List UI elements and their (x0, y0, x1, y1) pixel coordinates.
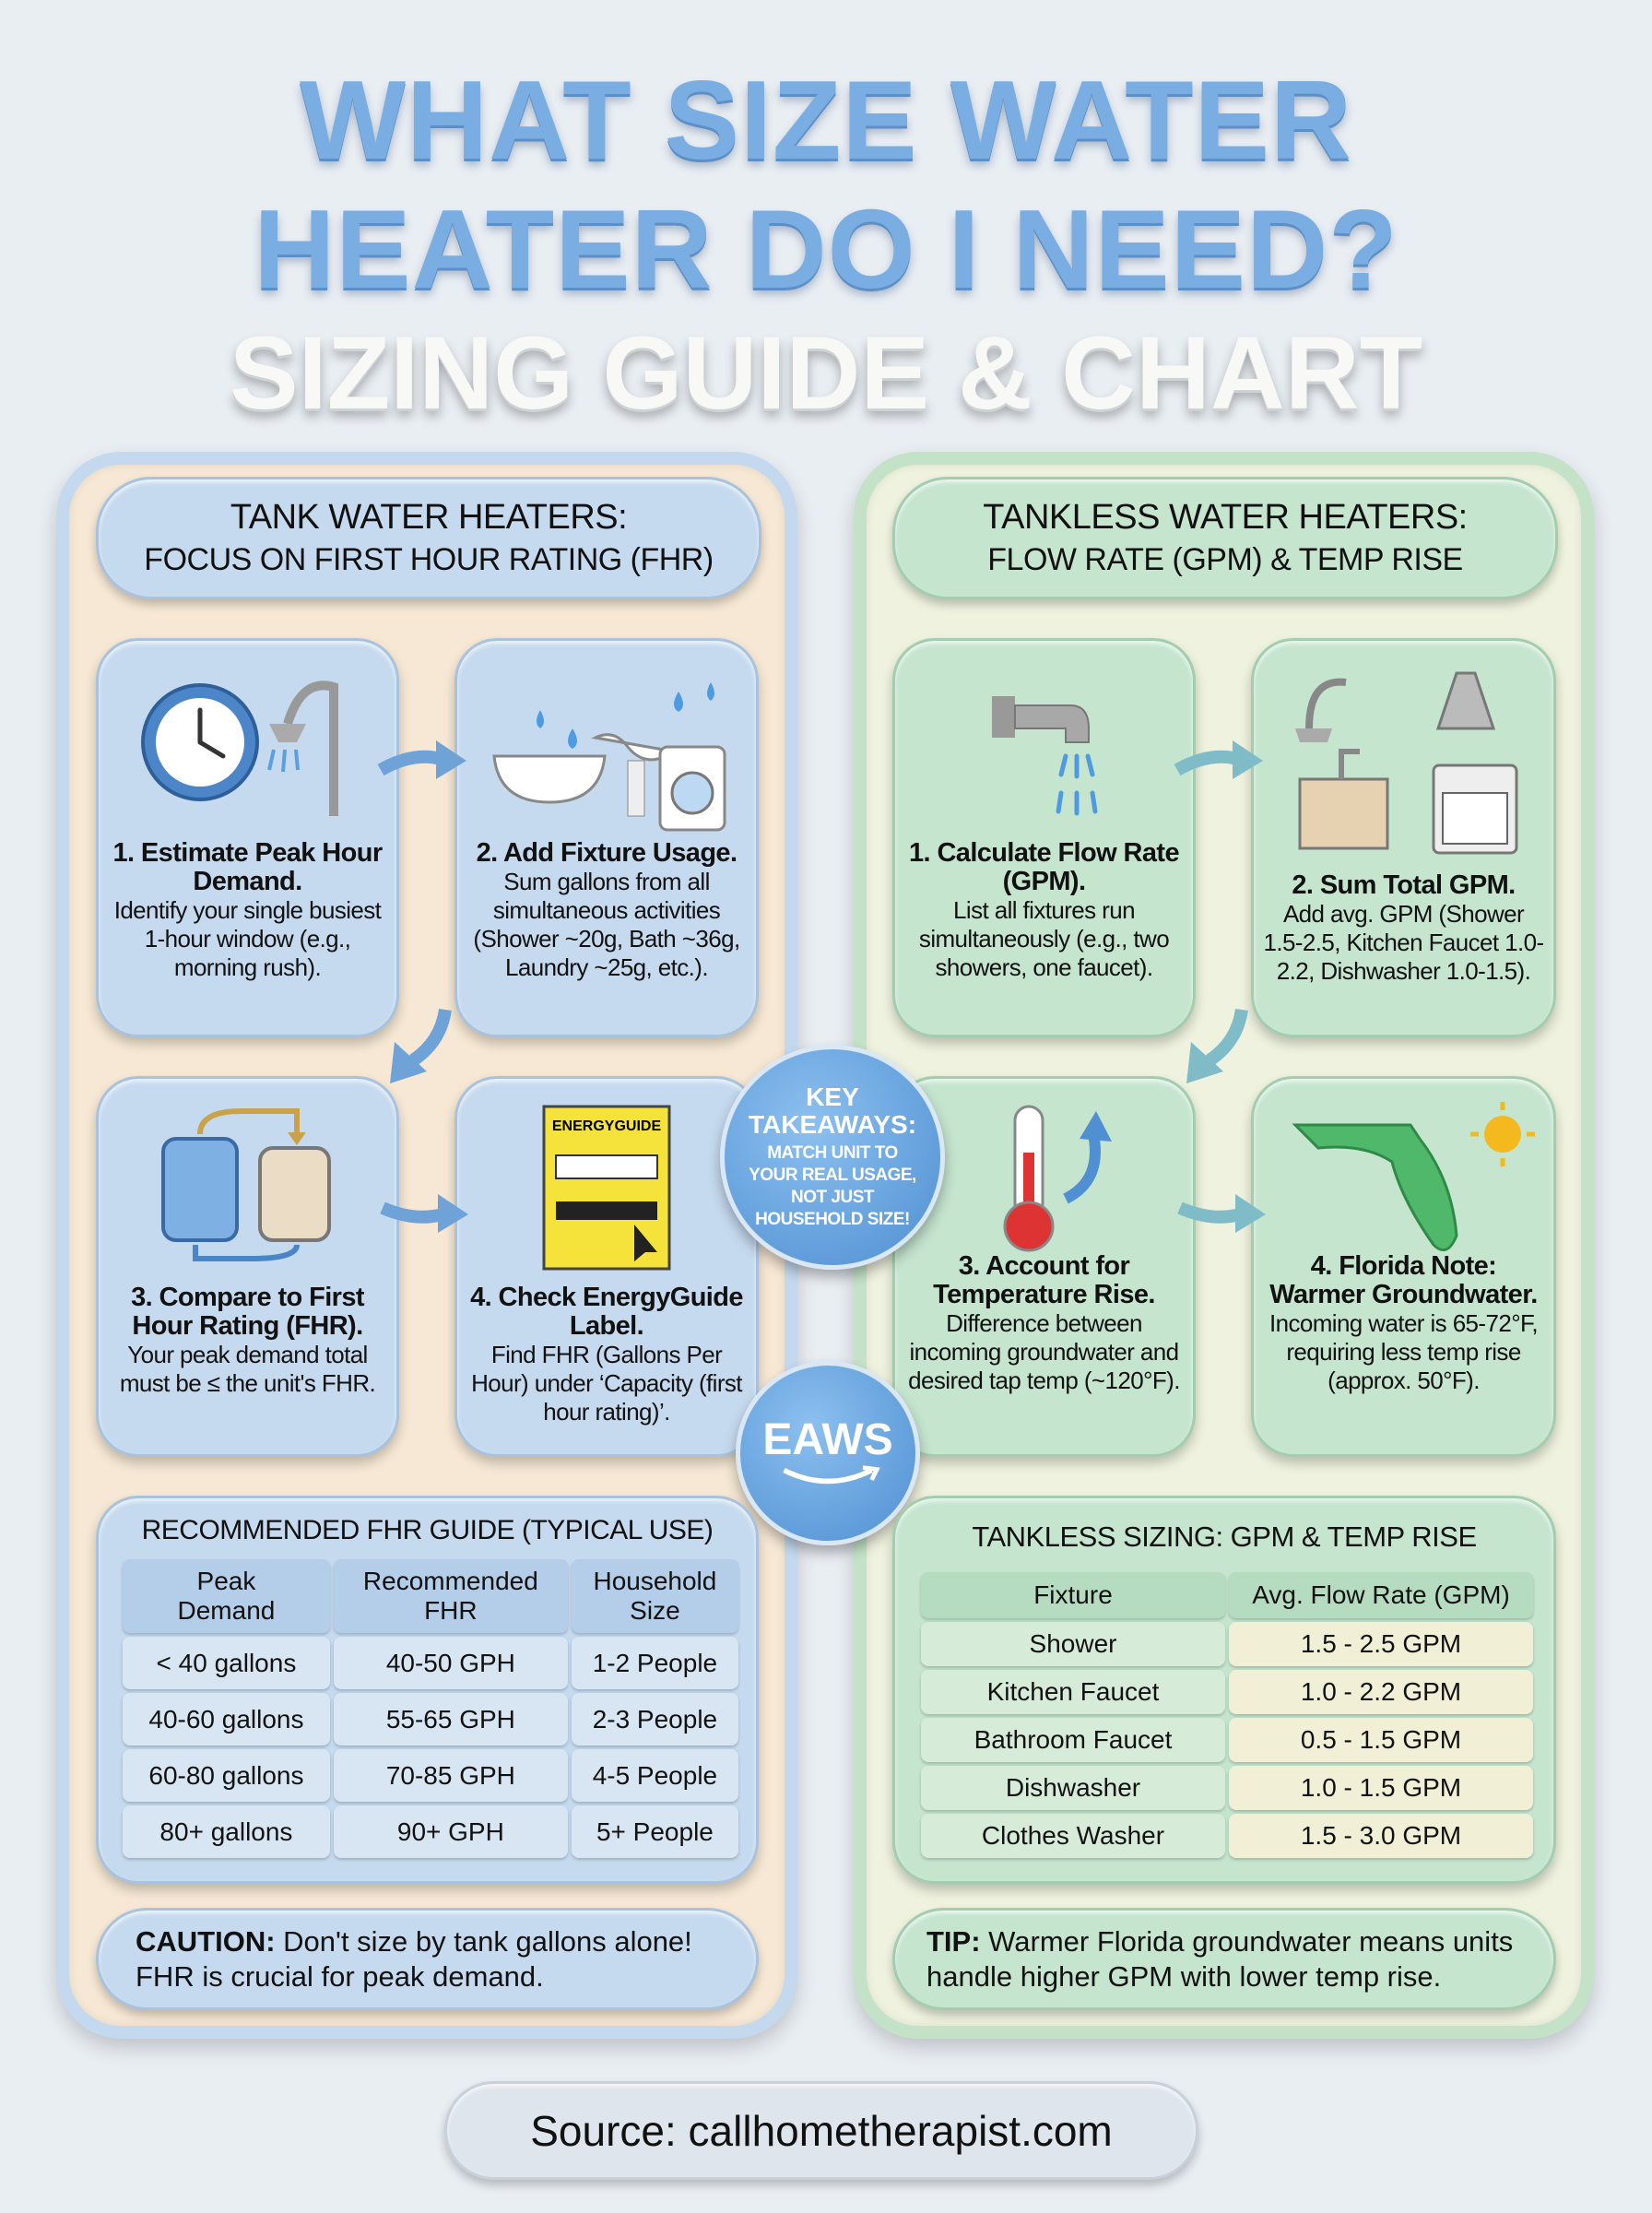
card: tankless step 2: Add avg. GPM (Shower 1.5-2.5, Kitchen Faucet 1.0-2.2, Dishwasher 1.0-1.5). (1263, 900, 1544, 985)
footer: source (444, 2081, 1198, 2180)
panel: tankless sizing table: TANKLESS SIZING: GPM & TEMP RISE (972, 1521, 1477, 1553)
table: flow rates: Shower (1030, 1629, 1116, 1658)
arrow: step1 to step2 tank (378, 740, 466, 779)
table: FHR guide: 55-65 GPH (386, 1704, 515, 1734)
heading: tank (96, 477, 761, 599)
table: flow rates: 1.5 - 3.0 GPM (1301, 1821, 1461, 1850)
card: tankless step 1 (892, 638, 1196, 1037)
table: flow rates: 1.0 - 2.2 GPM (1301, 1677, 1461, 1706)
table: flow rates: Bathroom Faucet (974, 1725, 1172, 1754)
table: FHR guide: < 40 gallons (157, 1649, 296, 1676)
card: tank step 2 (454, 638, 759, 1037)
title: HEATER DO I NEED? (254, 186, 1398, 312)
table: FHR guide: 4-5 People (593, 1761, 717, 1789)
card: tank step 4: Find FHR (Gallons Per Hour) under ‘Capacity (first hour rating)’. (471, 1341, 742, 1426)
heading: tankless (892, 477, 1558, 599)
heading: tank: FOCUS ON FIRST HOUR RATING (FHR) (144, 542, 714, 577)
callout: key takeaways: TAKEAWAYS: (749, 1110, 916, 1139)
card: tankless step 3: Difference between incoming groundwater and desired tap temp (~120°F). (908, 1309, 1180, 1394)
card: tankless step 4: 4. Florida Note: Warmer Groundwater. (1269, 1251, 1538, 1309)
icon: florida map and sun (1292, 1102, 1535, 1252)
table: FHR guide: Size (630, 1596, 680, 1625)
card: tank step 1: Identify your single busiest 1-hour window (e.g., morning rush). (114, 896, 381, 981)
card: tank step 3 (96, 1076, 399, 1457)
heading: tank: TANK WATER HEATERS: (230, 498, 627, 537)
arrow: step2 to step3 tankless (1186, 1009, 1248, 1083)
table: FHR guide: 80+ gallons (159, 1817, 292, 1846)
card: tank step 1 (96, 638, 399, 1037)
title: WHAT SIZE WATER (300, 57, 1352, 183)
table: FHR guide: Demand (178, 1596, 275, 1625)
card: tankless step 4 (1251, 1076, 1556, 1457)
card: tank step 2: 2. Add Fixture Usage. Sum gallons from all simultaneous activities (Shower ~20g, Bath ~36g, Laundry ~25g, etc.). (473, 838, 740, 981)
card: tank step 3: 3. Compare to First Hour Rating (FHR). (131, 1283, 364, 1341)
table: FHR guide: 90+ GPH (397, 1817, 504, 1846)
icon: energyguide label (542, 1105, 671, 1271)
card: tankless step 1: 1. Calculate Flow Rate (GPM). (909, 838, 1179, 896)
card: tank step 1: 1. Estimate Peak Hour Demand. (112, 838, 383, 896)
table: flow rates: 1.5 - 2.5 GPM (1301, 1629, 1461, 1658)
icon: faucet (992, 696, 1097, 815)
table: FHR guide: 5+ People (596, 1817, 714, 1846)
heading: tankless: FLOW RATE (GPM) & TEMP RISE (987, 542, 1463, 577)
card: tankless step 3 (892, 1076, 1196, 1457)
icon: two tanks (161, 1108, 331, 1261)
icon: energyguide label: ENERGYGUIDE (552, 1118, 661, 1134)
callout: caution: CAUTION: Don't size by tank gallons alone! (136, 1925, 692, 1957)
callout: caution: FHR is crucial for peak demand. (136, 1960, 544, 1992)
table: FHR guide: 60-80 gallons (148, 1761, 304, 1789)
card: tank step 4 (454, 1076, 759, 1457)
table: flow rates: Fixture (1033, 1580, 1113, 1609)
callout: key takeaways: KEY (806, 1083, 859, 1111)
table: FHR guide: Recommended (363, 1567, 538, 1595)
card: tankless step 2 (1251, 638, 1556, 1037)
table: flow rates: 1.0 - 1.5 GPM (1301, 1773, 1461, 1802)
table: flow rates: 0.5 - 1.5 GPM (1301, 1725, 1461, 1754)
heading: tankless: TANKLESS WATER HEATERS: (983, 498, 1468, 537)
title: SIZING GUIDE & CHART (230, 315, 1422, 431)
arrow: step3 to step4 tank (380, 1194, 468, 1233)
panel: recommended FHR guide table (96, 1496, 759, 1884)
table: FHR guide: Peak (197, 1567, 255, 1595)
panel: recommended FHR guide table: RECOMMENDED FHR GUIDE (TYPICAL USE) (142, 1515, 713, 1545)
icon: fixtures (492, 682, 726, 832)
callout: caution (96, 1908, 759, 2010)
icon: shower, hood, sink, dishwasher (1295, 671, 1517, 854)
panel: tank water heaters (56, 452, 797, 2039)
logo: EAWS (736, 1361, 920, 1545)
table: flow rates (920, 1572, 1534, 1861)
arrow: step2 to step3 tank (390, 1009, 452, 1083)
card: tankless step 4: Incoming water is 65-72°F, requiring less temp rise (approx. 50°F). (1269, 1309, 1538, 1394)
footer: source: Source: callhometherapist.com (530, 2106, 1113, 2154)
table: flow rates: Clothes Washer (982, 1821, 1164, 1850)
table: FHR guide (122, 1559, 739, 1861)
logo: EAWS: EAWS (762, 1414, 893, 1464)
card: tank step 4: 4. Check EnergyGuide Label. (470, 1283, 743, 1341)
table: FHR guide: FHR (424, 1596, 478, 1625)
card: tankless step 1: List all fixtures run simultaneously (e.g., two showers, one faucet). (919, 896, 1169, 981)
callout: key takeaways: YOUR REAL USAGE, (749, 1166, 916, 1185)
table: FHR guide: 70-85 GPH (386, 1761, 515, 1789)
callout: tip (892, 1908, 1556, 2010)
callout: tip: handle higher GPM with lower temp rise. (926, 1960, 1441, 1992)
icon: clock and shower (141, 680, 338, 816)
panel: tankless water heaters (854, 452, 1594, 2039)
callout: key takeaways: HOUSEHOLD SIZE! (755, 1210, 910, 1229)
arrow: step3 to step4 tankless (1177, 1194, 1266, 1233)
table: FHR guide: 1-2 People (593, 1649, 717, 1676)
callout: key takeaways (720, 1045, 945, 1270)
table: FHR guide: 2-3 People (593, 1704, 717, 1734)
callout: key takeaways: NOT JUST (791, 1188, 874, 1207)
panel: tankless sizing table (892, 1496, 1556, 1884)
callout: tip: TIP: Warmer Florida groundwater means units (926, 1925, 1513, 1957)
table: FHR guide: 40-60 gallons (148, 1704, 304, 1734)
table: flow rates: Kitchen Faucet (987, 1677, 1159, 1706)
table: FHR guide: Household (593, 1567, 716, 1595)
table: flow rates: Dishwasher (1006, 1773, 1140, 1802)
card: tank step 3: Your peak demand total must be ≤ the unit's FHR. (120, 1341, 375, 1397)
title (229, 57, 1427, 431)
table: FHR guide: 40-50 GPH (386, 1649, 515, 1676)
card: tankless step 2: 2. Sum Total GPM. (1292, 870, 1516, 900)
table: flow rates: Avg. Flow Rate (GPM) (1252, 1580, 1510, 1609)
card: tankless step 3: 3. Account for Temperature Rise. (933, 1251, 1155, 1309)
callout: key takeaways: MATCH UNIT TO (767, 1143, 898, 1163)
icon: thermometer with arrow (1003, 1105, 1112, 1252)
arrow: step1 to step2 tankless (1174, 740, 1263, 779)
